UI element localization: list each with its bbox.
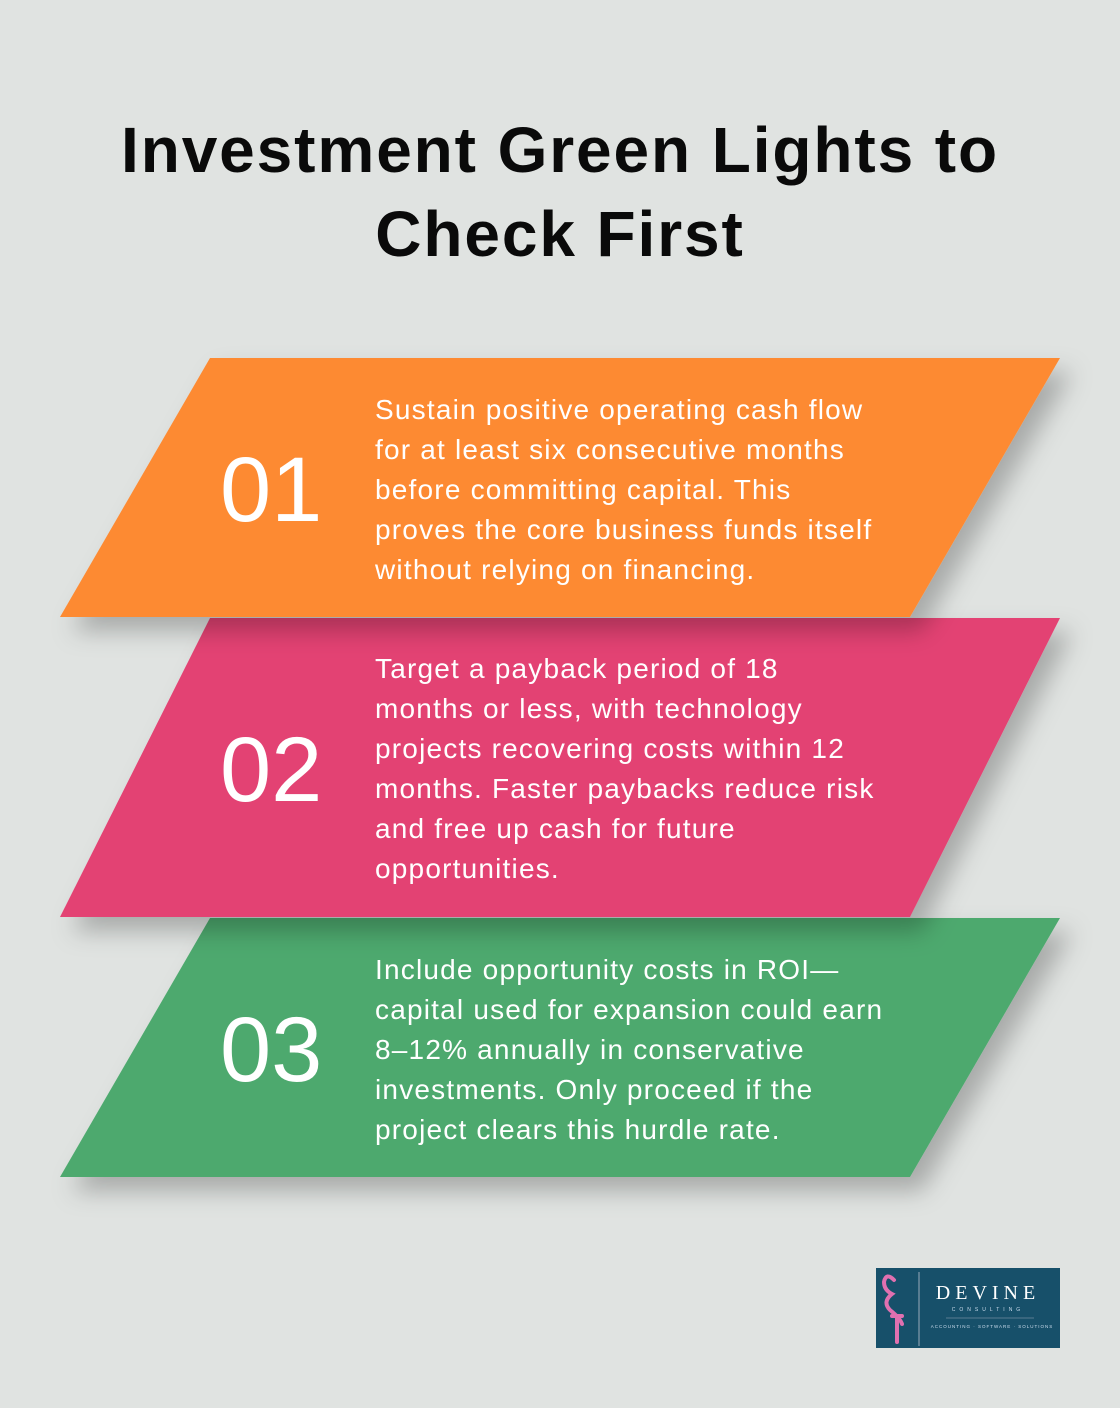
text 01: Sustain positive operating cash flow bbox=[375, 394, 863, 425]
number 02: 02 bbox=[220, 719, 322, 821]
text 01: without relying on financing. bbox=[375, 554, 755, 585]
text 02: months. Faster paybacks reduce risk bbox=[375, 773, 875, 804]
title bbox=[121, 114, 999, 270]
text 01: before committing capital. This bbox=[375, 474, 791, 505]
logo bbox=[876, 1268, 1060, 1348]
panel 3 bbox=[60, 918, 1060, 1177]
logo: DEVINE bbox=[936, 1282, 1040, 1304]
icon: flamingo bbox=[884, 1276, 902, 1342]
text 01 bbox=[375, 394, 872, 585]
text 01: proves the core business funds itself bbox=[375, 514, 872, 545]
text 03: capital used for expansion could earn bbox=[375, 994, 883, 1025]
text 03 bbox=[375, 954, 883, 1145]
text 03: project clears this hurdle rate. bbox=[375, 1114, 781, 1145]
number 03: 03 bbox=[220, 999, 322, 1101]
text 02: months or less, with technology bbox=[375, 693, 803, 724]
text 03: investments. Only proceed if the bbox=[375, 1074, 813, 1105]
text 03: Include opportunity costs in ROI— bbox=[375, 954, 839, 985]
text 01: for at least six consecutive months bbox=[375, 434, 845, 465]
text 02: projects recovering costs within 12 bbox=[375, 733, 845, 764]
text 02 bbox=[375, 653, 875, 884]
text 03: 8–12% annually in conservative bbox=[375, 1034, 805, 1065]
title: Check First bbox=[375, 198, 745, 270]
panel 1 bbox=[60, 358, 1060, 617]
logo: CONSULTING bbox=[952, 1307, 1024, 1313]
number 01: 01 bbox=[220, 439, 322, 541]
text 02: and free up cash for future bbox=[375, 813, 736, 844]
panel 2 bbox=[60, 618, 1060, 917]
text 02: opportunities. bbox=[375, 853, 560, 884]
text 02: Target a payback period of 18 bbox=[375, 653, 779, 684]
logo: ACCOUNTING · SOFTWARE · SOLUTIONS bbox=[931, 1324, 1053, 1329]
title: Investment Green Lights to bbox=[121, 114, 999, 186]
